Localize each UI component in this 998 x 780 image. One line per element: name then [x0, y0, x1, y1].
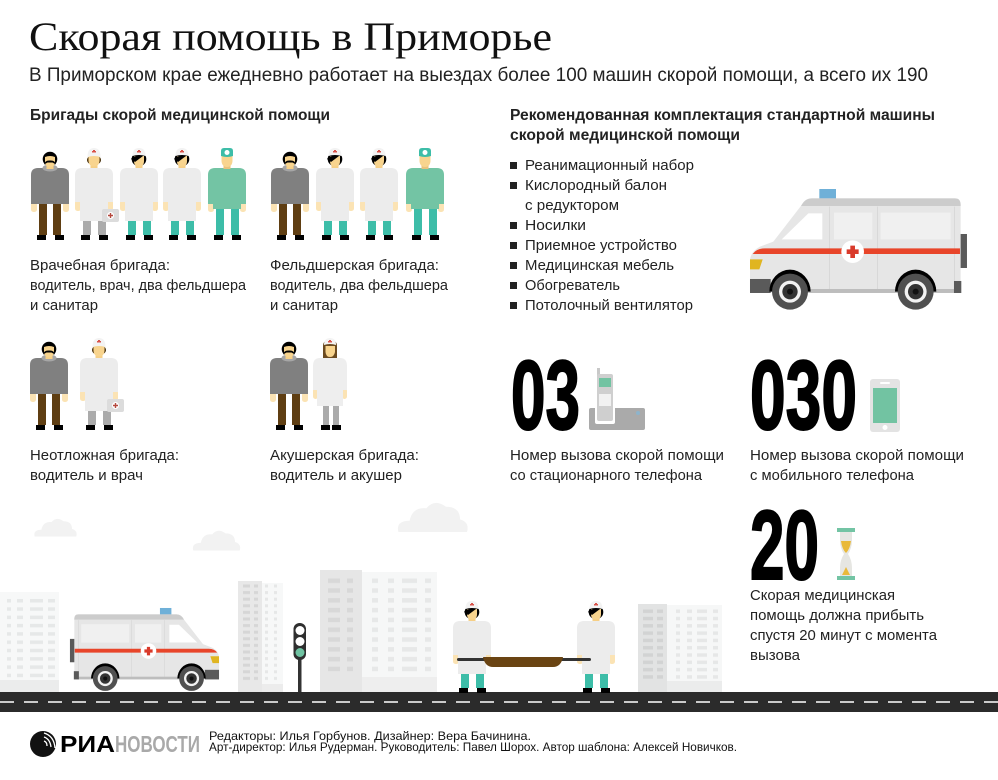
clouds — [34, 503, 468, 550]
traffic light — [294, 623, 306, 692]
heading: equipment — [510, 107, 935, 144]
obstetric brigade caption — [270, 447, 419, 484]
doctor brigade caption: водитель, врач, два фельдшера — [30, 277, 247, 294]
building: tall narrow — [238, 581, 283, 692]
icon: landline phone — [589, 368, 645, 430]
credits — [209, 729, 737, 754]
phone caption — [510, 447, 724, 484]
equipment list: Обогреватель — [525, 277, 620, 294]
doctor brigade caption — [30, 257, 247, 314]
phone caption: со стационарного телефона — [510, 467, 703, 484]
equipment list: Медицинская мебель — [525, 257, 674, 274]
equipment list: Носилки — [525, 217, 586, 234]
obstetric brigade caption: Акушерская бригада: — [270, 447, 419, 464]
icon: hourglass — [837, 528, 855, 580]
emergency brigade caption: Неотложная бригада: — [30, 447, 179, 464]
icon: mobile phone — [870, 379, 900, 432]
mobile caption: с мобильного телефона — [750, 467, 915, 484]
heading: equipment: скорой медицинской помощи — [510, 127, 740, 144]
feldsher brigade caption — [270, 257, 449, 314]
ambulance illustration — [750, 189, 967, 310]
equipment list: Потолочный вентилятор — [525, 297, 693, 314]
doctor brigade caption: и санитар — [30, 297, 98, 314]
equipment list: Кислородный балон — [525, 177, 667, 194]
arrival time caption: помощь должна прибыть — [750, 607, 924, 624]
emergency brigade caption — [30, 447, 179, 484]
number 20: 20 — [750, 490, 819, 600]
arrival time caption: вызова — [750, 647, 801, 664]
emergency brigade figures — [30, 338, 124, 430]
building: right — [638, 604, 722, 692]
logo: РИА — [60, 731, 115, 757]
equipment list: Реанимационный набор — [525, 157, 694, 174]
road — [0, 692, 998, 712]
credits: Арт-директор: Илья Рудерман. Руководитель: Павел Шорох. Автор шаблона: Алексей Новичков. — [209, 740, 737, 754]
equipment list: с редуктором — [525, 197, 619, 214]
heading: equipment: Рекомендованная комплектация стандартной машины — [510, 107, 935, 124]
doctor brigade figures — [31, 148, 246, 240]
arrival time caption — [750, 587, 938, 664]
equipment list: Приемное устройство — [525, 237, 677, 254]
logo — [30, 731, 200, 757]
heading: brigades: Бригады скорой медицинской помощи — [30, 107, 330, 124]
arrival time caption: спустя 20 минут с момента — [750, 627, 938, 644]
building: central — [320, 570, 437, 692]
number 030: 030 — [750, 340, 857, 450]
emergency brigade caption: водитель и врач — [30, 467, 143, 484]
feldsher brigade caption: водитель, два фельдшера — [270, 277, 449, 294]
number 03: 03 — [511, 340, 580, 450]
phone caption: Номер вызова скорой помощи — [510, 447, 724, 464]
subtitle: В Приморском крае ежедневно работает на выездах более 100 машин скорой помощи, а всего их 190 — [29, 65, 928, 86]
feldsher brigade figures — [271, 148, 444, 240]
feldsher brigade caption: и санитар — [270, 297, 338, 314]
paramedics with stretcher — [453, 601, 615, 693]
credits: Редакторы: Илья Горбунов. Дизайнер: Вера Бачинина. — [209, 729, 531, 743]
ambulance on road — [70, 608, 219, 691]
logo: НОВОСТИ — [115, 731, 200, 757]
building: left — [0, 592, 59, 692]
arrival time caption: Скорая медицинская — [750, 587, 895, 604]
equipment list — [510, 157, 694, 314]
title: Скорая помощь в Приморье — [29, 14, 552, 59]
doctor brigade caption: Врачебная бригада: — [30, 257, 170, 274]
mobile caption: Номер вызова скорой помощи — [750, 447, 964, 464]
mobile caption — [750, 447, 964, 484]
obstetric brigade figures — [270, 338, 347, 430]
obstetric brigade caption: водитель и акушер — [270, 467, 402, 484]
feldsher brigade caption: Фельдшерская бригада: — [270, 257, 439, 274]
